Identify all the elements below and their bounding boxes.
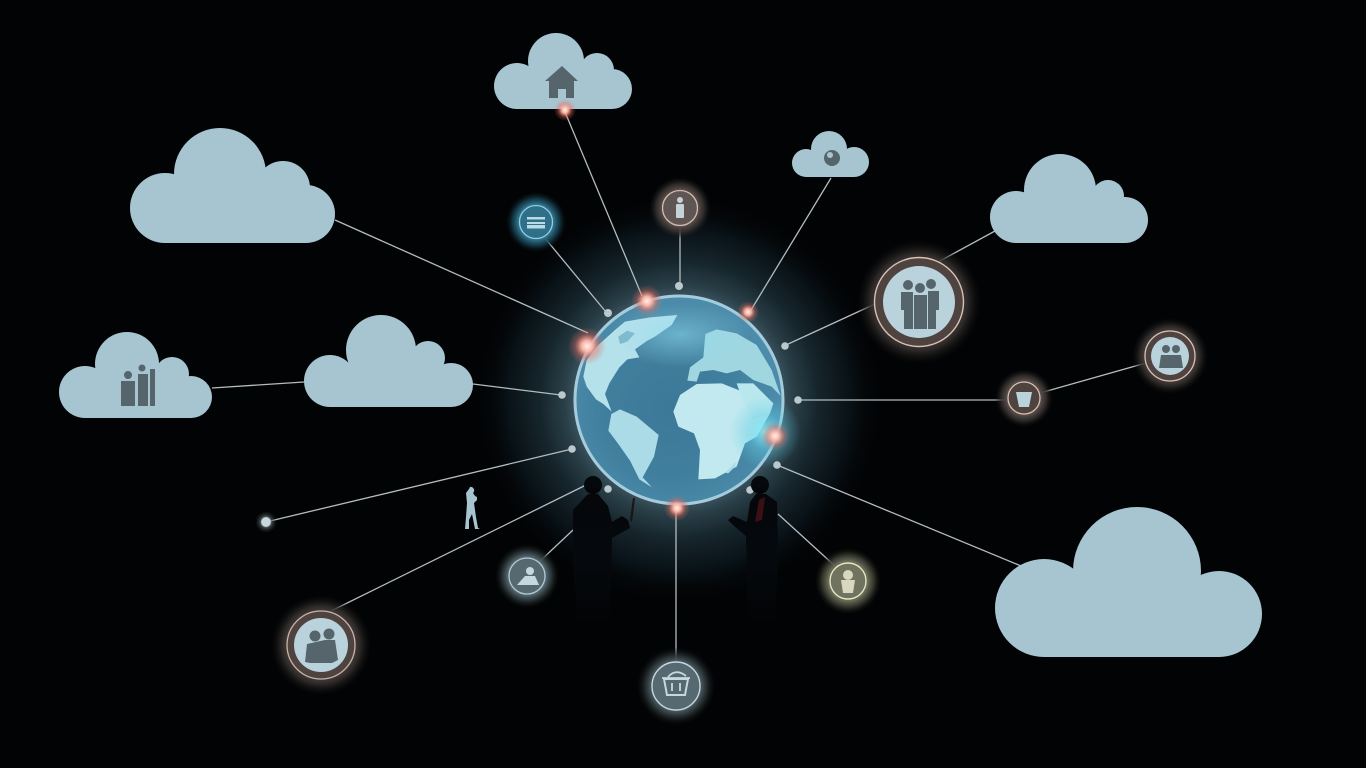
node: team of three [857, 240, 981, 364]
connection dots on globe rim [558, 282, 802, 494]
silhouette: left figure [573, 476, 635, 625]
cloud: large left [130, 128, 335, 243]
globe highlights [634, 309, 737, 362]
infographic canvas [59, 33, 1262, 722]
node: basket [637, 647, 715, 725]
icon: small globe [824, 150, 840, 166]
silhouette: right figure [728, 476, 778, 625]
glowing junction points [554, 99, 790, 521]
cloud: large bottom right [995, 507, 1262, 657]
icon: small standing person [465, 487, 480, 529]
cloud: top with house icon [494, 33, 632, 109]
glow behind globe [474, 195, 884, 605]
icon: house [545, 66, 578, 98]
node: person lower left [495, 544, 559, 608]
connector lines [212, 112, 1146, 662]
cloud: far left with bars icon [59, 332, 212, 418]
node: small end dot [255, 511, 277, 533]
cloud: upper right [990, 154, 1148, 243]
node: figure yellow [815, 548, 881, 614]
node: list [506, 192, 566, 252]
cloud: small with globe icon [792, 131, 869, 177]
continents [583, 303, 781, 487]
node: information [649, 177, 711, 239]
node: pair lower left [271, 595, 371, 695]
cloud: middle left [304, 315, 473, 407]
globe [575, 296, 801, 504]
icon: people bars [121, 364, 155, 406]
node: bag [995, 369, 1053, 427]
node: pair right [1132, 318, 1208, 394]
